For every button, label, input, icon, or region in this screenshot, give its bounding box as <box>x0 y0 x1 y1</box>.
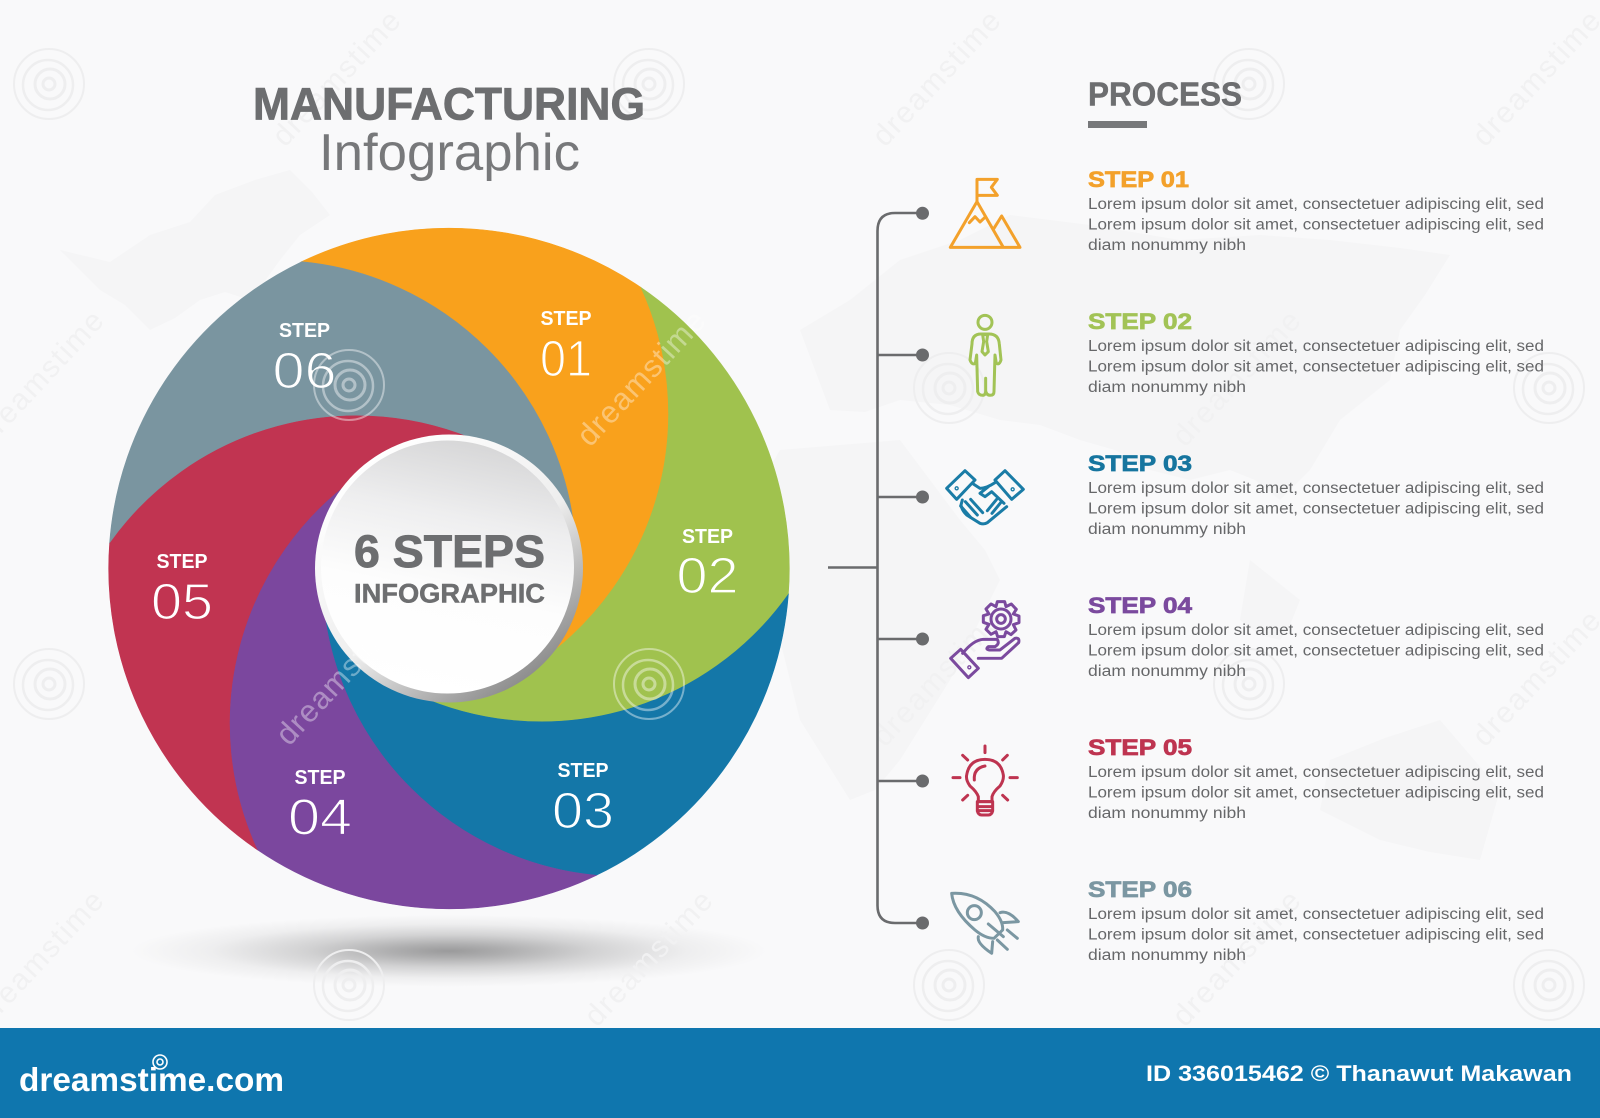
center text <box>354 526 545 608</box>
wheel label: step 05 <box>151 551 213 630</box>
watermark pattern: dreamstime <box>1166 884 1307 1033</box>
step 04 text <box>1088 593 1544 680</box>
icon: light bulb <box>953 746 1017 815</box>
watermark pattern: dreamstime <box>1166 304 1307 453</box>
step 03 text: Lorem ipsum dolor sit amet, consectetuer adipiscing elit, sed <box>1088 500 1544 518</box>
wheel watermarks: dreamstime <box>269 602 411 752</box>
wheel label: step 02 <box>676 526 738 604</box>
step 05 text: Lorem ipsum dolor sit amet, consectetuer adipiscing elit, sed <box>1088 784 1544 802</box>
step 02 text: diam nonummy nibh <box>1088 379 1246 396</box>
step 01 text: Lorem ipsum dolor sit amet, consectetuer adipiscing elit, sed <box>1088 196 1544 213</box>
watermark pattern: dreamstime <box>866 4 1007 153</box>
title: Infographic <box>319 124 580 182</box>
step 02 text: STEP 02 <box>1088 309 1192 334</box>
wheel label: step 05: 05 <box>151 573 213 630</box>
step 02 text <box>1088 309 1544 396</box>
process heading: PROCESS <box>1088 76 1242 112</box>
wheel label: step 05: STEP <box>156 551 208 573</box>
icon: businessman <box>970 315 1001 395</box>
wheel label: step 03: 03 <box>552 782 614 839</box>
wheel label: step 06: 06 <box>272 342 336 399</box>
wheel label: step 06 <box>272 320 336 399</box>
step 05 text: STEP 05 <box>1088 735 1192 760</box>
segment: step 02 green <box>296 271 854 804</box>
icon: rocket <box>952 893 1018 953</box>
step 03 text <box>1088 451 1544 538</box>
step 01 text <box>1088 167 1544 254</box>
step 02 text: Lorem ipsum dolor sit amet, consectetuer adipiscing elit, sed <box>1088 338 1544 355</box>
step 03 text: STEP 03 <box>1088 451 1192 476</box>
center circle <box>315 434 583 702</box>
wheel label: step 03: STEP <box>558 760 608 782</box>
connector lines <box>828 207 929 930</box>
step 04 text: diam nonummy nibh <box>1088 663 1246 680</box>
step 05 text <box>1088 735 1544 822</box>
step 02 text: Lorem ipsum dolor sit amet, consectetuer adipiscing elit, sed <box>1088 358 1544 376</box>
spiral wheel <box>44 208 854 929</box>
footer band <box>0 1028 1600 1118</box>
step 06 text: STEP 06 <box>1088 877 1192 902</box>
icon: hand with gear <box>951 602 1019 678</box>
segment: step 04 purple <box>229 477 596 909</box>
watermark pattern: dreamstime <box>266 4 407 153</box>
wheel shadow <box>131 915 767 987</box>
wheel label: step 03 <box>552 760 614 839</box>
wheel label: step 06: STEP <box>279 320 330 342</box>
wheel label: step 02: STEP <box>682 526 733 548</box>
title <box>253 78 645 182</box>
step 06 text: diam nonummy nibh <box>1088 947 1246 964</box>
footer credit: ID 336015462 © Thanawut Makawan <box>1146 1061 1572 1086</box>
segment: step 05 red <box>44 333 602 866</box>
step 01 text: Lorem ipsum dolor sit amet, consectetuer adipiscing elit, sed <box>1088 217 1544 234</box>
watermark pattern: dreamstime <box>866 604 1007 753</box>
center text: 6 STEPS <box>354 526 545 577</box>
wheel label: step 04: STEP <box>294 767 346 789</box>
step 05 text: Lorem ipsum dolor sit amet, consectetuer adipiscing elit, sed <box>1088 764 1544 781</box>
step 05 text: diam nonummy nibh <box>1088 805 1246 822</box>
wheel label: step 01 <box>540 308 592 387</box>
icon: mountain flag <box>950 179 1020 247</box>
step 04 text: Lorem ipsum dolor sit amet, consectetuer adipiscing elit, sed <box>1088 622 1544 639</box>
step 06 text: Lorem ipsum dolor sit amet, consectetuer adipiscing elit, sed <box>1088 926 1544 944</box>
segment: step 03 blue <box>260 395 817 929</box>
step 03 text: Lorem ipsum dolor sit amet, consectetuer adipiscing elit, sed <box>1088 480 1544 497</box>
step 06 text <box>1088 877 1544 964</box>
faint world map <box>60 170 1500 860</box>
step 01 text: STEP 01 <box>1088 167 1189 192</box>
footer logo: dreamstime.com <box>19 1061 284 1098</box>
title: MANUFACTURING <box>253 78 645 130</box>
step 03 text: diam nonummy nibh <box>1088 521 1246 538</box>
wheel watermarks: dreamstime <box>570 303 712 453</box>
wheel label: step 01: 01 <box>540 330 592 387</box>
step 01 text: diam nonummy nibh <box>1088 237 1246 254</box>
watermark pattern: dreamstime <box>578 884 719 1033</box>
step 06 text: Lorem ipsum dolor sit amet, consectetuer adipiscing elit, sed <box>1088 906 1544 923</box>
center text: INFOGRAPHIC <box>354 578 545 608</box>
step 04 text: Lorem ipsum dolor sit amet, consectetuer adipiscing elit, sed <box>1088 642 1544 660</box>
wheel label: step 04 <box>288 767 352 846</box>
process heading <box>1088 76 1242 128</box>
wheel label: step 02: 02 <box>676 547 738 604</box>
wheel watermarks <box>269 303 712 752</box>
wheel label: step 04: 04 <box>288 788 352 846</box>
wheel label: step 01: STEP <box>540 308 592 330</box>
segment: step 06 slate <box>81 208 638 742</box>
step 04 text: STEP 04 <box>1088 593 1193 618</box>
icon: handshake <box>947 471 1023 524</box>
segment: step 01 orange <box>302 228 669 660</box>
